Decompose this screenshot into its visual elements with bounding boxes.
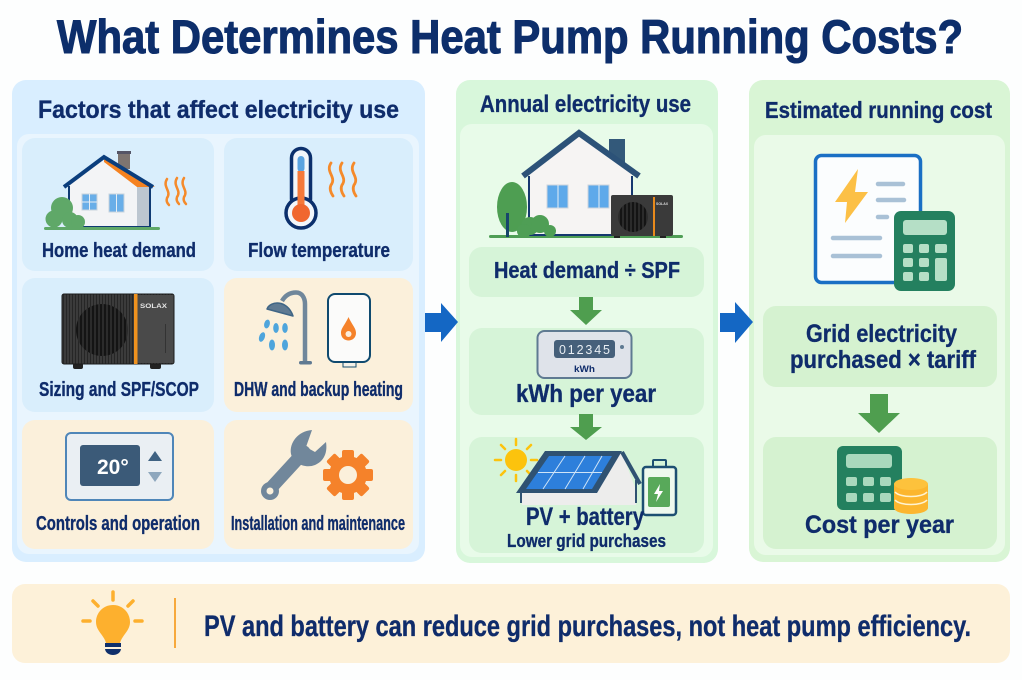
icon: heat pump unit: [62, 294, 174, 369]
box: grid electricity purchased times tariff: purchased × tariff: [790, 346, 977, 374]
icon: battery: [643, 460, 676, 515]
icon: electricity bill with calculator: [816, 156, 955, 291]
icon: thermostat: 20°: [97, 456, 129, 479]
box: grid electricity purchased times tariff: Grid electricity: [806, 320, 957, 348]
icon: house with heat waves: [44, 151, 186, 230]
box: cost per year: [763, 437, 997, 549]
card: home heat demand: [22, 138, 214, 271]
heading: factors: Factors that affect electricity use: [38, 96, 399, 124]
label: kWh per year: kWh per year: [516, 380, 656, 408]
card: flow temperature: [224, 138, 413, 271]
icon: heat pump unit: SOLAX: [140, 303, 168, 310]
label: controls and operation: Controls and operation: [36, 513, 200, 535]
heading: annual electricity use: Annual electricity use: [480, 91, 691, 118]
arrow: down to PV and battery: [570, 414, 602, 440]
box: heat demand divided by SPF: Heat demand ÷ SPF: [494, 257, 680, 283]
icon: electricity meter: 012345: [559, 343, 610, 357]
label: DHW and backup heating: DHW and backup heating: [234, 379, 403, 401]
label: installation and maintenance: Installation and maintenance: [231, 513, 405, 535]
box: kWh per year: [469, 328, 704, 415]
arrow: down to kWh per year: [570, 297, 602, 325]
box: PV and battery: [469, 437, 704, 553]
card: sizing and SPF/SCOP: [22, 278, 214, 412]
box: grid electricity purchased times tariff: [763, 306, 997, 387]
arrow: down to cost per year: [858, 394, 900, 433]
label: home heat demand: Home heat demand: [42, 240, 196, 262]
label: PV + battery: PV + battery: [526, 503, 644, 531]
icon: wrench and gear: [261, 430, 373, 500]
box: heat demand divided by SPF: [469, 247, 704, 297]
label: flow temperature: Flow temperature: [248, 240, 390, 262]
label: sizing and SPF/SCOP: Sizing and SPF/SCOP: [39, 379, 199, 401]
icon: solar roof: [516, 451, 640, 505]
card: installation and maintenance: [224, 420, 413, 549]
icon: sun: [495, 439, 537, 481]
panel: factors that affect electricity use: [12, 80, 425, 562]
panel: annual electricity use: [456, 80, 718, 563]
icon: shower and hot water tank: [258, 292, 370, 367]
card: DHW and backup heating: [224, 278, 413, 412]
icon: light bulb: [83, 592, 142, 655]
callout: key takeaway: [12, 584, 1010, 663]
icon: electricity meter: [538, 331, 632, 378]
icon: electricity meter: kWh: [574, 364, 595, 374]
arrow: factors to annual electricity use: [425, 303, 458, 342]
panel: estimated running cost: [749, 80, 1010, 562]
divider line: [174, 598, 176, 648]
icon: calculator and coins: [837, 446, 928, 514]
label: lower grid purchases: Lower grid purchases: [507, 531, 666, 551]
icon: house with heat pump: [489, 133, 683, 238]
arrow: annual electricity use to running cost: [720, 302, 753, 343]
card: controls and operation: [22, 420, 214, 549]
heading: estimated running cost: Estimated running cost: [765, 97, 992, 123]
icon: thermometer with heat waves: [286, 148, 356, 228]
icon: thermostat: [66, 433, 173, 500]
label: cost per year: Cost per year: [805, 511, 954, 539]
icon: house with heat pump: SOLAX: [656, 202, 669, 206]
